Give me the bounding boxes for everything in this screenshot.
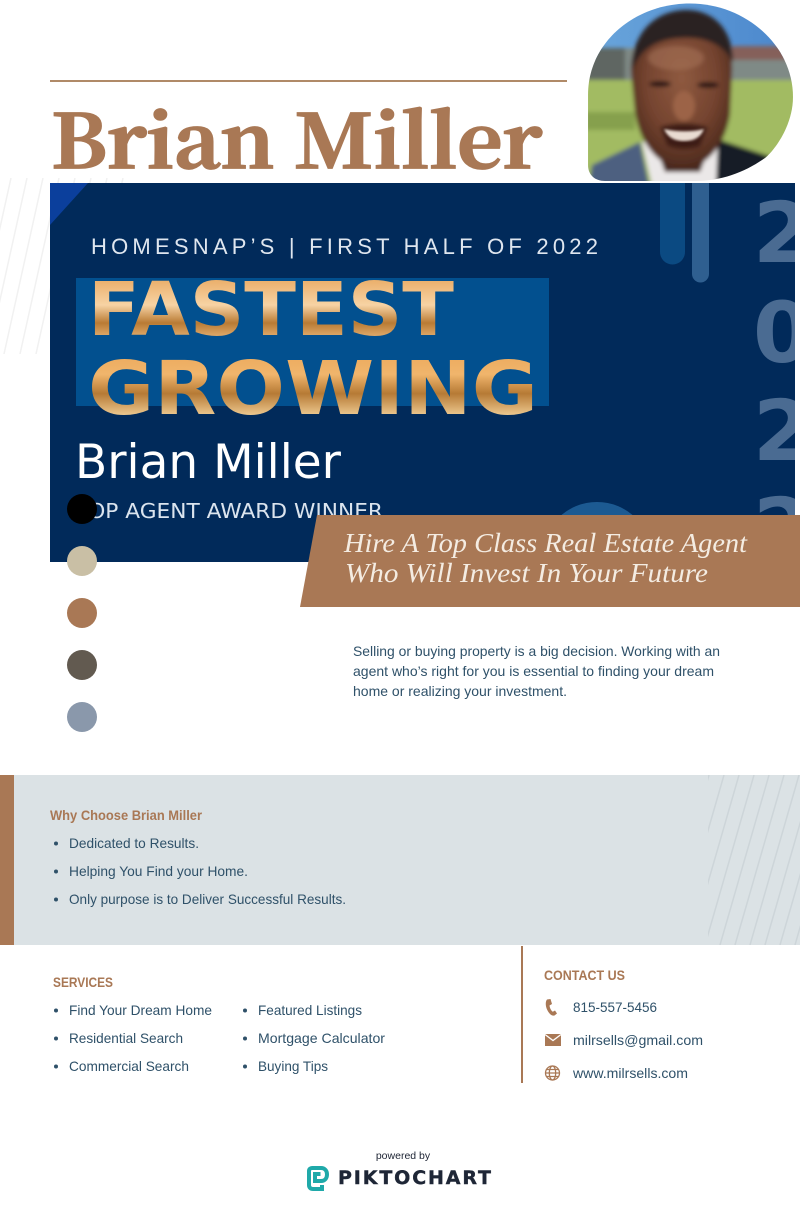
jacket <box>714 138 770 180</box>
contact heading: CONTACT US <box>544 967 625 983</box>
footer: piktochart branding: PIKTOCHART <box>338 1167 491 1189</box>
why choose heading: Why Choose Brian Miller <box>50 807 202 823</box>
intro paragraph: agent who’s right for you is essential to finding your dream <box>353 663 714 679</box>
services list column one: Residential Search <box>69 1030 183 1046</box>
intro paragraph: Selling or buying property is a big decision. Working with an <box>353 643 720 659</box>
forehead highlight <box>648 46 704 70</box>
why choose list: Dedicated to Results. <box>69 835 199 851</box>
shirt <box>642 140 718 185</box>
footer: piktochart branding: powered by <box>376 1150 431 1162</box>
banner award line: TOP AGENT AWARD WINNER <box>74 499 383 523</box>
tagline ribbon: Hire A Top Class Real Estate Agent <box>343 528 749 558</box>
contact website: www.milrsells.com <box>572 1065 688 1081</box>
services list column two: Featured Listings <box>258 1002 362 1018</box>
icon: phone <box>546 999 557 1016</box>
contact email: milrsells@gmail.com <box>573 1032 703 1048</box>
tagline ribbon: Who Will Invest In Your Future <box>345 558 708 588</box>
title: agent name: Brian Miller <box>51 84 542 190</box>
intro paragraph <box>353 643 720 699</box>
hair <box>632 10 733 70</box>
tagline ribbon <box>300 515 800 607</box>
icon: piktochart logo <box>309 1168 327 1189</box>
why choose list <box>54 835 346 907</box>
intro paragraph: home or realizing your investment. <box>353 683 567 699</box>
services list column two: Mortgage Calculator <box>258 1030 385 1046</box>
banner headline: GROWING <box>88 346 538 432</box>
services list column one: Commercial Search <box>69 1058 189 1074</box>
panel: services <box>53 974 385 1074</box>
footer: piktochart branding <box>309 1150 491 1189</box>
teeth <box>664 129 704 141</box>
services list column one <box>54 1002 212 1074</box>
panel: contact <box>521 946 703 1083</box>
banner year digits <box>757 200 795 515</box>
banner highlight block <box>76 278 549 406</box>
services heading: SERVICES <box>53 974 113 990</box>
title rule <box>50 80 567 82</box>
services list column one: Find Your Dream Home <box>69 1002 212 1018</box>
agent photo <box>585 0 797 190</box>
icon: globe <box>546 1066 560 1080</box>
services list column two <box>243 1002 385 1074</box>
decorative line pattern: top left <box>0 178 123 354</box>
icon: mail <box>545 1034 561 1046</box>
banner subtitle: HOMESNAP’S | FIRST HALF OF 2022 <box>91 234 598 259</box>
panel: why choose <box>0 775 800 945</box>
why choose list: Only purpose is to Deliver Successful Results. <box>69 891 346 907</box>
why choose list: Helping You Find your Home. <box>69 863 248 879</box>
contact phone: 815-557-5456 <box>573 999 657 1015</box>
banner corner triangle <box>50 183 88 225</box>
palette dots <box>67 494 97 732</box>
banner name: Brian Miller <box>75 435 342 490</box>
banner decorative bars <box>660 183 709 282</box>
banner decorative circle <box>562 502 632 515</box>
services list column two: Buying Tips <box>258 1058 328 1074</box>
banner headline: FASTEST <box>88 267 455 353</box>
banner headline <box>92 280 532 415</box>
award banner <box>50 183 795 562</box>
neck and head <box>659 158 706 175</box>
